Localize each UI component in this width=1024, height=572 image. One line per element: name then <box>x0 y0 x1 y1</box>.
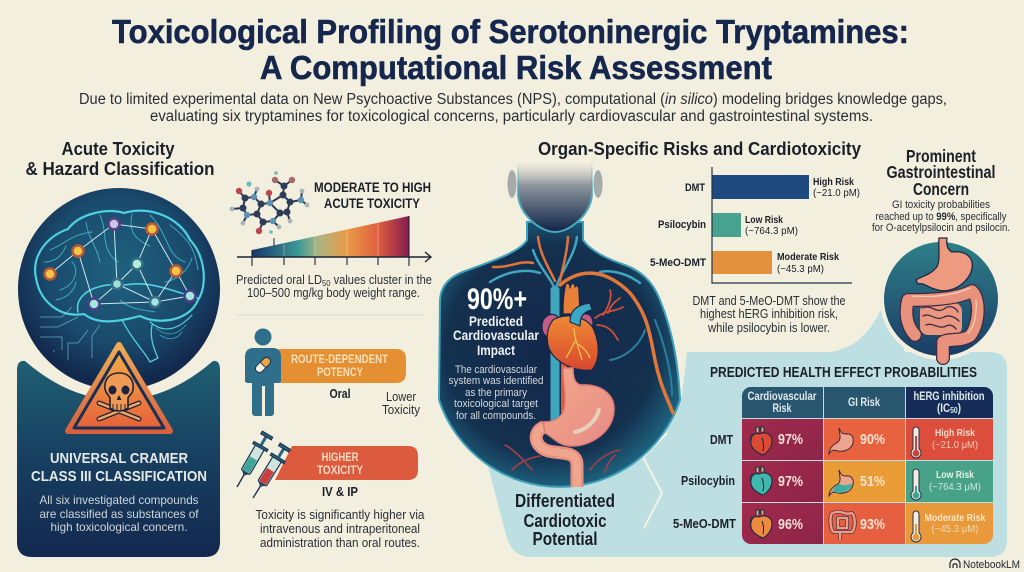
light blue backdrop panel <box>488 300 1007 557</box>
hERG inhibition cells <box>911 427 986 542</box>
cramer body text: All six investigated compounds <box>40 493 198 507</box>
chart: toxicity wedge scale <box>237 216 431 266</box>
heading: differentiated cardiotoxic potential <box>515 491 615 549</box>
chart: hERG inhibition bars <box>650 167 860 283</box>
cramer heading: CLASS III CLASSIFICATION <box>31 468 207 485</box>
chart: hERG inhibition bars: 5-MeO-DMT <box>650 257 706 269</box>
hERG caption: while psilocybin is lower. <box>707 321 830 335</box>
stomach <box>536 368 614 487</box>
oral route labels <box>330 387 421 417</box>
heading: acute toxicity <box>26 138 214 179</box>
stat label: Predicted <box>469 313 523 329</box>
heading: gastrointestinal concern: Concern <box>913 179 969 199</box>
cardiovascular body text: toxicological target <box>454 398 538 410</box>
route caption: Toxicity is significantly higher via <box>256 508 425 522</box>
panel: cramer classification <box>17 361 220 557</box>
chart: hERG inhibition bars: (~45.3 pM) <box>777 263 824 275</box>
cardiovascular body text: The cardiovascular <box>455 364 537 376</box>
higher toxicity bar: TOXICITY <box>317 465 363 477</box>
higher toxicity bar: HIGHER <box>322 452 359 464</box>
route-dependent potency bar <box>275 349 406 383</box>
row labels: 5-MeO-DMT <box>673 517 736 531</box>
chart: hERG inhibition bars: DMT <box>685 182 705 194</box>
cardiovascular risk cells: 97% <box>778 432 803 448</box>
table header text: Cardiovascular <box>748 391 817 403</box>
cramer body text: are classified as substances of <box>40 507 199 521</box>
icon: warning triangle with skull <box>68 345 170 431</box>
heading: acute toxicity: Acute Toxicity <box>62 138 175 159</box>
heading: differentiated cardiotoxic potential: Potential <box>532 529 598 549</box>
row labels <box>673 433 736 531</box>
hERG inhibition cells: Moderate Risk <box>924 512 986 524</box>
heading: differentiated cardiotoxic potential: Differentiated <box>515 491 615 511</box>
icon: person with pill <box>245 328 281 416</box>
table header text <box>748 391 984 415</box>
oral route labels: Toxicity <box>382 403 421 417</box>
big stat: 90%+ <box>467 283 527 316</box>
icon: syringes <box>230 430 292 502</box>
IV and IP label: IV & IP <box>322 485 358 499</box>
oral route labels: Lower <box>386 390 416 404</box>
cardiovascular body text: system was identified <box>448 375 544 387</box>
NotebookLM watermark: NotebookLM <box>963 559 1020 571</box>
cardiovascular risk cells: 97% <box>778 474 803 490</box>
GI caption <box>872 199 1010 234</box>
cramer heading <box>31 450 207 485</box>
heading: acute toxicity: & Hazard Classification <box>26 158 214 179</box>
cramer heading: UNIVERSAL CRAMER <box>50 450 188 467</box>
body silhouette <box>439 222 680 487</box>
stat label <box>453 313 539 358</box>
title <box>112 13 909 86</box>
hERG inhibition cells: (~45.3 μM) <box>932 523 978 535</box>
row labels: DMT <box>710 433 733 447</box>
table header text: hERG inhibition <box>914 391 984 403</box>
stat label: Cardiovascular <box>453 327 539 343</box>
cramer body text <box>40 493 199 534</box>
icon: neural brain <box>18 188 220 390</box>
figure: human torso with organs <box>439 162 680 487</box>
title: A Computational Risk Assessment <box>260 49 772 86</box>
head <box>508 162 602 232</box>
table cells <box>742 387 993 544</box>
stat label: Impact <box>477 342 515 358</box>
cardiovascular risk cells <box>750 427 803 538</box>
table header text: (IC <box>937 403 952 415</box>
chart: hERG inhibition bars: (~21.0 pM) <box>813 187 860 199</box>
chart: hERG inhibition bars: High Risk <box>813 176 854 188</box>
heading: differentiated cardiotoxic potential: Cardiotoxic <box>524 511 606 531</box>
cardiovascular body text <box>448 364 544 422</box>
heading: moderate to high acute toxicity <box>314 180 431 211</box>
route caption <box>256 508 425 550</box>
GI risk cells: 93% <box>860 517 885 533</box>
GI risk cells: 51% <box>860 474 885 490</box>
table: predicted health effects <box>673 387 993 544</box>
heading: organ-specific risks: Organ-Specific Risks and Cardiotoxicity <box>538 138 862 159</box>
row labels: Psilocybin <box>681 474 735 488</box>
intro text <box>79 91 947 125</box>
heading: gastrointestinal concern: Prominent <box>906 146 976 166</box>
route-dependent potency bar: POTENCY <box>317 367 363 379</box>
chart: hERG inhibition bars: Moderate Risk <box>777 251 839 263</box>
route caption: administration than oral routes. <box>260 536 420 550</box>
GI caption: reached up to 99%, specifically <box>876 211 1007 223</box>
chart: hERG inhibition bars: Psilocybin <box>658 219 706 231</box>
table header text: 50 <box>950 406 958 415</box>
table header text: ) <box>958 403 961 415</box>
LD50 caption: Predicted oral LD <box>236 273 333 287</box>
cardiovascular risk cells: 96% <box>778 517 803 533</box>
chart: hERG inhibition bars: Low Risk <box>745 214 783 226</box>
LD50 caption <box>236 273 432 300</box>
cramer body text: high toxicological concern. <box>50 520 188 534</box>
LD50 caption: values cluster in the <box>330 273 432 287</box>
icon: stomach and intestines <box>880 238 1002 360</box>
table heading: PREDICTED HEALTH EFFECT PROBABILITIES <box>710 365 977 381</box>
table header text: GI Risk <box>848 397 880 409</box>
LD50 caption: 50 <box>322 278 331 288</box>
hERG inhibition cells: (~21.0 μM) <box>932 439 978 451</box>
higher toxicity bar <box>275 446 418 480</box>
intro text: evaluating six tryptamines for toxicological concerns, particularly cardiovascular and gastrointestinal systems. <box>150 108 873 125</box>
hERG inhibition cells: (~764.3 μM) <box>929 481 981 493</box>
title: Toxicological Profiling of Serotoninergic Tryptamines: <box>112 13 909 50</box>
GI risk cells <box>829 428 885 540</box>
oral route labels: Oral <box>330 387 350 401</box>
blood vessels <box>490 237 673 472</box>
table header text: Risk <box>772 403 792 415</box>
heading: moderate to high acute toxicity: ACUTE TOXICITY <box>324 196 420 211</box>
hERG inhibition cells: Low Risk <box>936 469 974 481</box>
route caption: intravenous and intraperitoneal <box>260 522 420 536</box>
LD50 caption: 100–500 mg/kg body weight range. <box>247 286 420 300</box>
route-dependent potency bar: ROUTE-DEPENDENT <box>291 354 388 366</box>
GI risk cells: 90% <box>860 432 885 448</box>
chart: hERG inhibition bars: (~764.3 pM) <box>745 225 798 237</box>
intro text: Due to limited experimental data on New Psychoactive Substances (NPS), computational (in silico) modeling bridges knowledge gaps, <box>79 91 947 108</box>
heading: moderate to high acute toxicity: MODERATE TO HIGH <box>314 180 431 195</box>
GI caption: GI toxicity probabilities <box>892 199 990 211</box>
hERG caption <box>692 294 846 335</box>
cardiovascular body text: as the primary <box>465 387 527 399</box>
heart <box>542 283 598 370</box>
hERG caption: highest hERG inhibition risk, <box>700 307 838 321</box>
zigzag divider <box>643 433 667 528</box>
heading: gastrointestinal concern: Gastrointestinal <box>886 162 996 182</box>
icon: molecule <box>230 171 309 234</box>
hERG inhibition cells: High Risk <box>935 427 975 439</box>
cardiovascular body text: for all compounds. <box>456 410 536 422</box>
heading: gastrointestinal concern <box>886 146 996 199</box>
hERG caption: DMT and 5-MeO-DMT show the <box>692 294 846 308</box>
